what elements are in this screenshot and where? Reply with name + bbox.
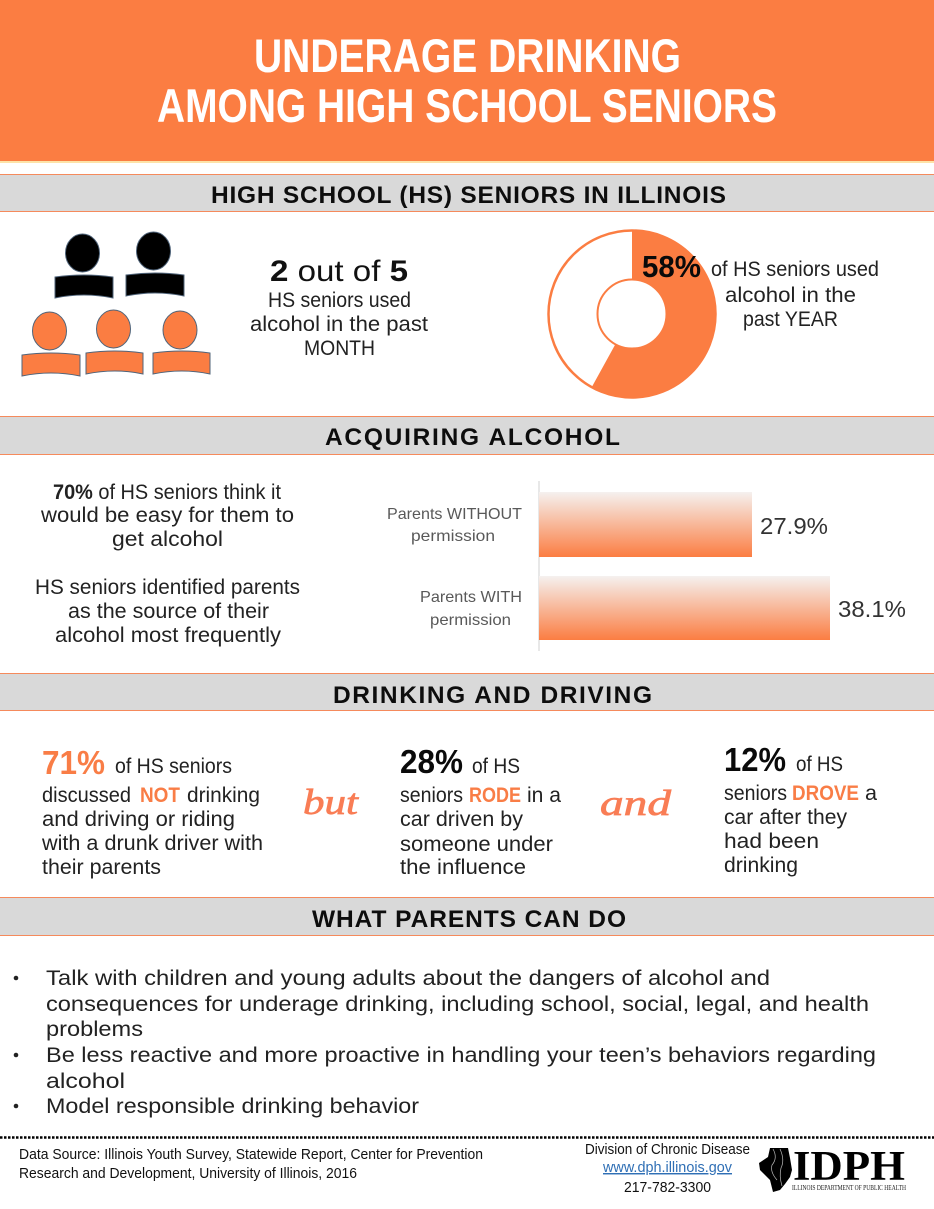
stat: 28% rode: seniors <box>400 783 463 807</box>
stat: 28% rode: the influence <box>400 855 526 879</box>
section heading: what parents can do: WHAT PARENTS CAN DO <box>312 906 626 933</box>
stat: 12% drove: drinking <box>724 853 798 877</box>
connector word: and: and <box>600 783 672 823</box>
section heading: acquiring alcohol: ACQUIRING ALCOHOL <box>325 424 620 451</box>
stat: 28% rode: 28% <box>400 743 463 780</box>
stat: 58% past year <box>642 249 879 331</box>
text: ease of getting alcohol: 70% of HS seniors think it <box>53 480 281 504</box>
stat: 2 out of 5: alcohol in the past <box>250 312 428 336</box>
contact information: 217-782-3300 <box>624 1180 711 1196</box>
section heading: drinking and driving <box>0 674 934 710</box>
section heading: high school seniors: HIGH SCHOOL (HS) SENIORS IN ILLINOIS <box>211 182 726 209</box>
stat: 2 out of 5: MONTH <box>304 336 375 360</box>
bar: parents with permission: Parents WITH <box>420 589 522 606</box>
stat: 12% drove: DROVE <box>792 781 859 805</box>
text: ease of getting alcohol: would be easy for them to <box>40 503 294 527</box>
bullet: talk with children: problems <box>46 1017 143 1041</box>
contact information <box>585 1142 750 1196</box>
section heading: what parents can do <box>0 898 934 936</box>
bar: parents without permission: permission <box>411 528 495 545</box>
stat: 12% drove: car after they <box>724 805 847 829</box>
title: AMONG HIGH SCHOOL SENIORS <box>157 79 777 132</box>
stat: 28% rode: in a <box>527 783 561 807</box>
section heading: high school seniors <box>0 174 934 212</box>
stat: 2 out of 5: 2 out of 5 <box>270 255 408 288</box>
title <box>157 29 777 132</box>
stat: 71% discussed: their parents <box>42 855 161 879</box>
stat: 58% past year: 58% <box>642 249 701 284</box>
stat: 28% rode: car driven by <box>400 807 523 831</box>
bullet: model behavior: Model responsible drinking behavior <box>46 1094 419 1118</box>
stat: 71% discussed: NOT <box>140 783 180 807</box>
bar: parents with permission: 38.1% <box>838 596 906 622</box>
bullet: be proactive: Be less reactive and more proactive in handling your teen’s behaviors regarding <box>46 1043 876 1067</box>
text: parents as source: HS seniors identified parents <box>35 575 300 599</box>
stat: 71% discussed: drinking <box>187 783 260 807</box>
stat: 12% drove: of HS <box>796 752 843 776</box>
stat: 28% rode: RODE <box>469 783 521 807</box>
stat: 12% drove: 12% <box>724 741 786 778</box>
icon: five people, two highlighted <box>22 232 210 376</box>
text: ease of getting alcohol: get alcohol <box>112 527 223 551</box>
contact information: Division of Chronic Disease <box>585 1142 750 1158</box>
contact information: www.dph.illinois.gov <box>602 1160 733 1176</box>
stat: 12% drove: a <box>865 781 877 805</box>
stat: 58% past year: of HS seniors used <box>711 257 879 281</box>
bullet: talk with children <box>14 966 869 1041</box>
bullet: talk with children: Talk with children and young adults about the dangers of alcohol and <box>46 966 770 990</box>
data source: Data Source: Illinois Youth Survey, Statewide Report, Center for Prevention <box>19 1147 483 1163</box>
icon: Illinois silhouette <box>759 1148 792 1192</box>
stat: 71% discussed: and driving or riding <box>42 807 235 831</box>
text: parents as source: as the source of their <box>68 599 269 623</box>
bar: parents with permission: permission <box>430 612 511 629</box>
text: ease of getting alcohol <box>40 480 294 551</box>
stat: 58% past year: alcohol in the <box>725 283 856 307</box>
bar: parents without permission <box>387 492 828 557</box>
stat: 12% drove: seniors <box>724 781 787 805</box>
header banner <box>0 0 934 163</box>
title: UNDERAGE DRINKING <box>254 29 681 82</box>
stat: 58% past year: past YEAR <box>743 307 838 331</box>
stat: 71% discussed: 71% <box>42 744 105 781</box>
stat: 71% discussed <box>41 744 263 879</box>
stat: 28% rode: someone under <box>400 832 553 856</box>
donut chart: 58% <box>548 230 716 398</box>
section heading: drinking and driving: DRINKING AND DRIVING <box>333 682 652 709</box>
text: parents as source: alcohol most frequently <box>55 623 281 647</box>
data source: Research and Development, University of Illinois, 2016 <box>19 1166 357 1182</box>
bar: parents with permission <box>420 576 906 640</box>
stat: 71% discussed: discussed <box>42 783 131 807</box>
stat: 2 out of 5: HS seniors used <box>268 288 411 312</box>
stat: 71% discussed: of HS seniors <box>115 754 232 778</box>
bullet: be proactive: alcohol <box>46 1069 125 1093</box>
connector word: but: but <box>303 782 359 822</box>
stat: 28% rode <box>400 743 561 879</box>
stat: 2 out of 5 <box>250 255 428 360</box>
text: parents as source <box>35 575 300 647</box>
bar: parents without permission: Parents WITHOUT <box>387 506 522 523</box>
data source <box>19 1147 483 1182</box>
bullet: talk with children: consequences for underage drinking, including school, social, legal, and health <box>46 992 869 1016</box>
stat: 28% rode: of HS <box>472 754 520 778</box>
stat: 12% drove: had been <box>724 829 819 853</box>
bullet: be proactive <box>14 1043 876 1093</box>
logo: IDPH: IDPH <box>793 1144 905 1190</box>
logo: IDPH <box>759 1144 906 1192</box>
bar chart: alcohol source <box>387 481 906 651</box>
bar: parents without permission: 27.9% <box>760 513 828 539</box>
stat: 12% drove <box>724 741 877 877</box>
bullet list: parent actions <box>14 966 876 1118</box>
stat: 71% discussed: with a drunk driver with <box>41 831 263 855</box>
section heading: acquiring alcohol <box>0 416 934 454</box>
